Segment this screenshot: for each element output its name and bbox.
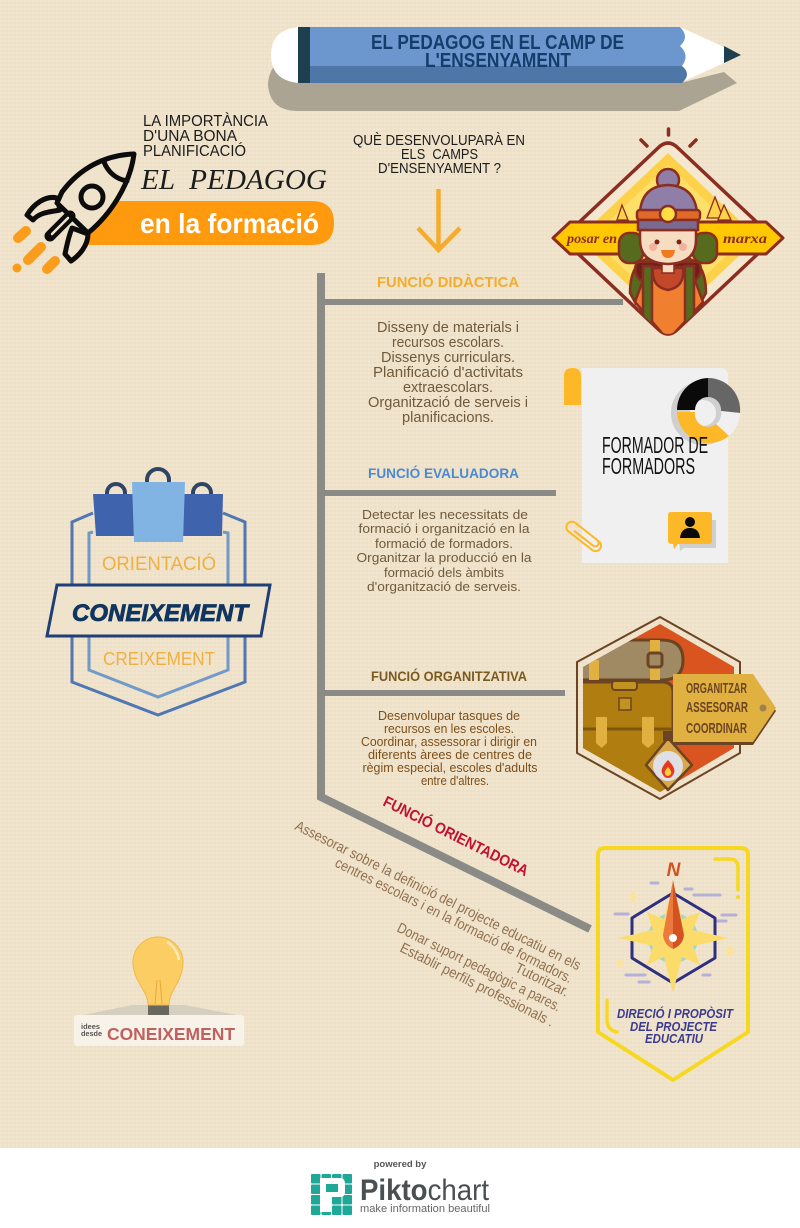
face [649,240,687,258]
heading: funcio didactica: FUNCIÓ DIDÀCTICA [377,273,519,291]
pencil title text [371,32,624,72]
text block: evaluadora: Organitzar la producció en la [356,550,532,565]
donut chart [677,378,740,443]
text block: evaluadora: Detectar les necessitats de [362,507,528,522]
tree structure lines [321,273,623,929]
icon: lantern [646,731,692,790]
sign labels: ASSESORAR [686,699,748,716]
footer [0,1148,800,1228]
orange pill: en la formacio: en la formació [140,208,319,239]
heading: funcio evaluadora: FUNCIÓ EVALUADORA [368,464,519,481]
compass needle [663,880,673,949]
compass dashes [615,883,736,982]
text block: evaluadora: formació dels àmbits [384,565,504,580]
text block: didactica: extraescolars. [403,380,493,396]
pencil title text: EL PEDAGOG EN EL CAMP DE [371,32,624,54]
text block: orientadora: Tutoritzar. [512,960,571,1000]
text block: didactica: Disseny de materials i [377,320,519,336]
badge: posar en marxa explorer [553,129,783,340]
text block: orientadora: centres escolars i en la formació de formadors. [332,855,575,987]
subtitle: la importancia [143,111,268,160]
arrow: down [418,189,460,250]
compass caption: DEL PROJECTE [630,1020,718,1034]
badge: compass [598,848,748,1080]
compass hexagon [632,893,715,983]
orange pill: en la formacio [80,201,334,245]
sign labels: COORDINAR [686,720,747,737]
trees [617,197,731,220]
text block: organitzativa: diferents àrees de centres de [368,748,532,762]
band labels: posar en [566,231,617,246]
text block: organitzativa: règim especial, escoles d'adults [362,761,538,775]
pencil title text: L'ENSENYAMENT [425,50,571,72]
compass caption: DIRECIÓ I PROPÒSIT [617,1006,734,1021]
text block: didactica: recursos escolars. [392,335,504,351]
bags [93,494,134,536]
band labels [566,231,767,246]
question text: ELS CAMPS [401,147,478,163]
question text: D'ENSENYAMENT ? [378,161,501,177]
compass caption: EDUCATIU [645,1032,704,1046]
text block: organitzativa: Desenvolupar tasques de [378,709,520,723]
text block: organitzativa: recursos en les escoles. [384,722,514,736]
piktochart wordmark: Piktochart [360,1174,490,1207]
text block: didactica: Organització de serveis i [368,395,528,411]
question text: QUÈ DESENVOLUPARÀ EN [353,132,525,149]
heading: funcio organitzativa: FUNCIÓ ORGANITZATIVA [371,667,527,684]
question text [353,132,525,177]
badge rays [641,129,696,146]
icon: light bulb card [74,937,244,1046]
piktochart logo mark [311,1174,352,1215]
panel title: FORMADOR DE [602,432,708,458]
compass sparkles [616,891,735,968]
backpack [575,640,683,800]
compass caption [617,1006,734,1046]
text block: evaluadora [356,507,532,594]
text block: organitzativa: Coordinar, assessorar i dirigir en [361,735,537,749]
bag handles [107,469,211,495]
panel title [602,432,708,479]
tagline: make information beautiful [360,1203,490,1215]
subtitle: la importancia: LA IMPORTÀNCIA [143,111,268,130]
heading: el pedagog: EL PEDAGOG [140,164,327,196]
card title: CONEIXEMENT [107,1024,235,1044]
rocket flames [12,231,55,272]
panel: formador de formadors [564,368,740,563]
text block: evaluadora: d'organització de serveis. [367,579,521,594]
sign labels [686,680,748,737]
text block: didactica: Dissenys curriculars. [381,350,515,366]
icon: chat person [668,512,716,551]
heading: funcio orientadora: FUNCIÓ ORIENTADORA [380,792,531,880]
pencil title banner [268,27,741,111]
icon: paperclip [564,519,603,553]
compass star [618,885,728,993]
sign labels: ORGANITZAR [686,680,747,697]
banner text: CONEIXEMENT [72,600,250,627]
text block: orientadora: Donar suport pedagògic a pares. [394,920,563,1015]
text block: organitzativa: entre d'altres. [421,774,489,788]
yellow tab [564,368,581,405]
subtitle: la importancia: PLANIFICACIÓ [143,141,246,160]
character [619,169,717,340]
text block: didactica: planificacions. [402,410,494,426]
text block: evaluadora: formació i organització en la [358,521,530,536]
creixement label: CREIXEMENT [103,649,215,669]
north label: N [667,860,682,881]
text block: evaluadora: formació de formadors. [375,536,513,551]
text block: didactica: Planificació d'activitats [373,365,523,381]
text block: orientadora: Assesorar sobre la definició del projecte educatiu en els [292,818,583,974]
card small label: desde [81,1029,102,1038]
sign [673,677,776,745]
icon: rocket [12,154,134,272]
text block: didactica [368,320,528,426]
text block: orientadora: Establir perfils professionals . [397,940,556,1030]
text block: organitzativa [361,709,538,788]
banner [47,585,270,636]
panel title: FORMADORS [602,453,695,479]
badge: coneixement shield [47,469,270,715]
subtitle: la importancia: D'UNA BONA [143,128,237,145]
card small label [81,1022,102,1038]
orientacio label: ORIENTACIÓ [102,553,216,575]
badge: backpack organitzar [575,617,776,800]
powered by: powered by [374,1159,427,1170]
card small label: idees [81,1022,100,1031]
band labels: marxa [723,231,767,246]
